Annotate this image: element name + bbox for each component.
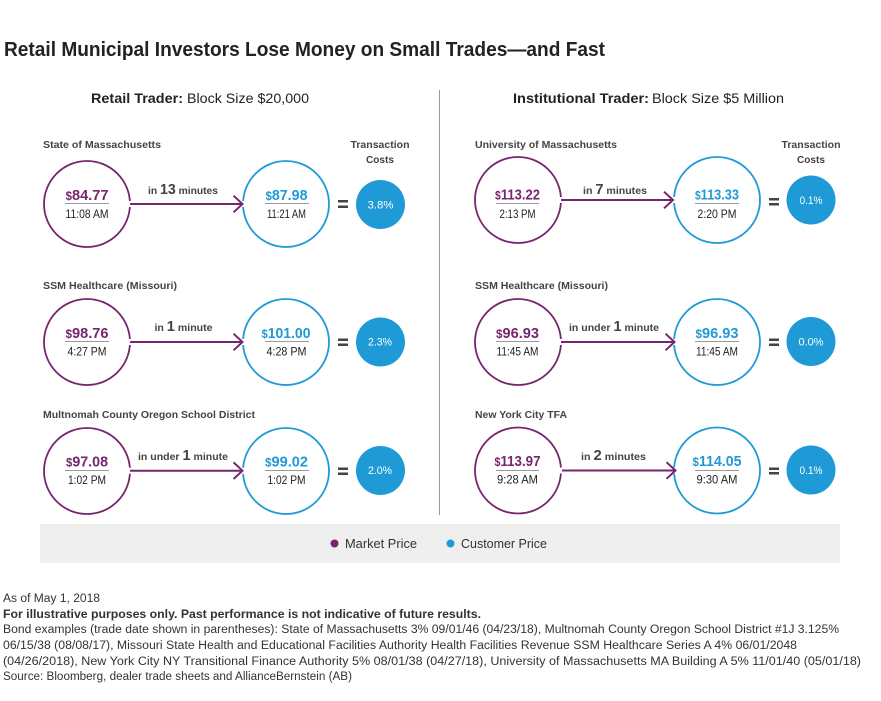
column header: transaction costs right: Transaction	[782, 139, 840, 151]
customer price circle: 11:21 AM	[267, 209, 306, 221]
transaction cost: 2.3%	[368, 336, 392, 348]
customer price circle	[243, 299, 329, 385]
equals sign	[769, 198, 779, 206]
heading: retail trader: Block Size $20,000	[187, 90, 309, 106]
customer price circle: $99.02	[265, 454, 308, 470]
customer price circle	[674, 299, 760, 385]
footnotes: For illustrative purposes only. Past performance is not indicative of future results.	[3, 609, 481, 621]
bond name: University of Massachusetts	[475, 139, 617, 151]
customer price circle: $101.00	[262, 325, 310, 342]
time label: in 1 minute	[154, 319, 213, 335]
transaction cost	[356, 180, 405, 229]
market price circle: 4:27 PM	[68, 346, 106, 358]
arrow	[560, 192, 675, 208]
market price circle: 11:08 AM	[66, 209, 108, 221]
bond name: Multnomah County Oregon School District	[43, 409, 255, 421]
bond name: State of Massachusetts	[43, 139, 161, 151]
customer price circle: $114.05	[692, 453, 742, 470]
transaction cost	[786, 176, 836, 224]
equals sign	[338, 338, 348, 346]
column header: transaction costs left: Costs	[366, 154, 394, 166]
time label: in 13 minutes	[148, 182, 218, 198]
panel: Multnomah County	[43, 409, 405, 514]
arrow	[128, 334, 245, 350]
market price circle: $98.76	[66, 325, 108, 342]
bond name: SSM Healthcare (Missouri)	[475, 280, 608, 292]
column header: transaction costs left: Transaction	[350, 139, 410, 151]
footnotes: As of May 1, 2018	[3, 593, 100, 605]
column header: transaction costs right: Costs	[797, 154, 825, 166]
customer price circle: 11:45 AM	[696, 346, 738, 358]
equals sign	[769, 338, 779, 346]
market price circle: $113.97	[494, 453, 540, 470]
arrow	[560, 462, 677, 479]
customer price circle	[674, 157, 760, 243]
footnotes: Source: Bloomberg, dealer trade sheets and AllianceBernstein (AB)	[3, 671, 352, 683]
transaction cost: 2.0%	[368, 465, 392, 477]
footnotes: Bond examples (trade date shown in parentheses): State of Massachusetts 3% 09/01/46 (04/23/18), Multnomah County Oregon School District #1J 3.125%	[3, 624, 839, 636]
market price circle	[475, 157, 561, 243]
panel: University of Massachusetts	[475, 139, 836, 243]
equals sign	[769, 468, 779, 474]
transaction cost	[356, 446, 405, 495]
customer price circle	[243, 161, 329, 247]
arrow	[128, 462, 245, 479]
market price circle: $84.77	[66, 187, 108, 204]
arrow	[128, 196, 245, 212]
market price circle: 9:28 AM	[497, 474, 538, 486]
time label: in under 1 minute	[569, 319, 659, 335]
transaction cost	[356, 318, 405, 366]
title: Retail Municipal Investors Lose Money on Small Trades—and Fast	[4, 39, 605, 61]
customer price circle	[243, 428, 329, 514]
legend	[40, 524, 840, 563]
customer price circle	[674, 428, 760, 514]
market price circle: $96.93	[496, 325, 539, 342]
time label: in under 1 minute	[138, 448, 228, 464]
transaction cost: 0.0%	[798, 336, 824, 348]
panel: New York City TFA	[475, 409, 836, 514]
market price circle	[44, 161, 130, 247]
equals sign	[338, 468, 348, 475]
transaction cost	[786, 446, 836, 494]
transaction cost: 3.8%	[368, 200, 394, 212]
transaction cost: 0.1%	[800, 465, 823, 477]
customer price circle: $87.98	[266, 187, 308, 204]
market price circle: 11:45 AM	[496, 346, 538, 358]
market price circle	[475, 428, 561, 514]
heading: institutional trader: Institutional Trader:	[513, 90, 649, 106]
market price circle: 2:13 PM	[500, 209, 536, 221]
customer price circle: $96.93	[696, 325, 738, 342]
market price circle: $97.08	[66, 454, 108, 470]
customer price circle: 1:02 PM	[268, 475, 306, 487]
bond name: New York City TFA	[475, 409, 567, 421]
market price circle	[44, 299, 130, 385]
customer price circle: 2:20 PM	[698, 209, 736, 221]
transaction cost: 0.1%	[800, 195, 823, 207]
panel: SSM Healthcare right	[475, 280, 836, 385]
heading: institutional trader: Block Size $5 Million	[652, 90, 784, 106]
customer price circle: 4:28 PM	[266, 346, 306, 358]
panel: SSM Healthcare left	[43, 280, 405, 385]
equals sign	[338, 200, 348, 208]
transaction cost	[786, 317, 836, 366]
market price circle	[44, 428, 130, 514]
legend item: customer price: Customer Price	[461, 537, 547, 551]
arrow	[560, 334, 676, 350]
customer price circle: $113.33	[695, 186, 739, 204]
footnotes: (04/26/2018), New York City NY Transitional Finance Authority 5% 08/01/38 (04/27/18), University of Massachusetts MA Building A 5% 11/01/40 (05/01/18)	[3, 656, 861, 668]
market price circle: $113.22	[495, 186, 540, 204]
footnotes: 06/15/38 (08/08/17), Missouri State Health and Educational Facilities Authority Health Facilities Revenue SSM Healthcare Series A 4% 06/01/2048	[3, 640, 797, 652]
footnotes	[3, 593, 861, 683]
time label: in 2 minutes	[581, 448, 646, 464]
legend item: market price: Market Price	[345, 537, 417, 551]
market price circle	[475, 299, 561, 385]
panel: State of Massachusetts	[43, 139, 405, 247]
customer price circle: 9:30 AM	[696, 474, 738, 486]
heading: retail trader: Retail Trader:	[91, 90, 183, 106]
market price circle: 1:02 PM	[68, 475, 106, 487]
bond name: SSM Healthcare (Missouri)	[43, 280, 177, 292]
time label: in 7 minutes	[583, 182, 647, 198]
